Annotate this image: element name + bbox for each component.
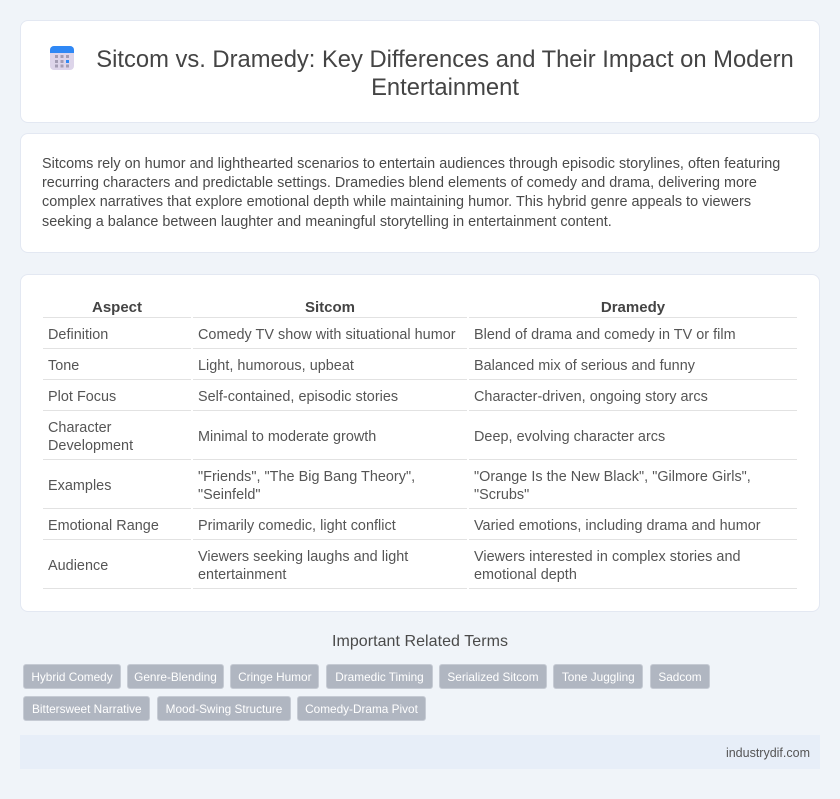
- comparison table: Development: [48, 438, 133, 454]
- table header: Dramedy: Dramedy: [601, 299, 665, 316]
- comparison table: "Scrubs": [474, 487, 529, 503]
- comparison table: emotional depth: [474, 567, 577, 583]
- intro text: Sitcoms rely on humor and lighthearted scenarios to entertain audiences through episodic storylines, often featuring: [42, 156, 780, 172]
- related terms tags: Cringe Humor: [238, 670, 312, 684]
- related terms tags: Serialized Sitcom: [447, 670, 539, 684]
- title: Entertainment: [371, 74, 519, 101]
- table header: Sitcom: Sitcom: [305, 299, 355, 316]
- related terms tags: Comedy-Drama Pivot: [305, 702, 418, 716]
- title: Sitcom vs. Dramedy: Key Differences and Their Impact on Modern: [96, 46, 794, 73]
- intro text: recurring characters and predictable settings. Dramedies blend elements of comedy and drama, delivering more: [42, 175, 757, 191]
- comparison table: Viewers seeking laughs and light: [198, 549, 408, 565]
- comparison table: entertainment: [198, 567, 286, 583]
- intro text: seeking a balance between laughter and meaningful storytelling in entertainment content.: [42, 214, 612, 230]
- related terms tags: Dramedic Timing: [335, 670, 424, 684]
- intro text: complex narratives that explore emotional depth while maintaining humor. This hybrid genre appeals to viewers: [42, 194, 751, 210]
- comparison table: Character-driven, ongoing story arcs: [474, 389, 708, 405]
- comparison table: Primarily comedic, light conflict: [198, 518, 396, 534]
- panel: header: [20, 20, 820, 123]
- related terms tags: Mood-Swing Structure: [166, 702, 282, 716]
- related terms tags: Sadcom: [658, 670, 702, 684]
- comparison table: Deep, evolving character arcs: [474, 429, 665, 445]
- table header: Aspect: Aspect: [92, 299, 142, 316]
- title: [96, 46, 794, 101]
- related terms tags: Bittersweet Narrative: [32, 702, 142, 716]
- intro text: [42, 156, 780, 230]
- comparison table: Tone: [48, 358, 79, 374]
- comparison table: Minimal to moderate growth: [198, 429, 376, 445]
- footer site name: industrydif.com: [726, 746, 810, 760]
- comparison table: Plot Focus: [48, 389, 116, 405]
- comparison table: "Seinfeld": [198, 487, 261, 503]
- comparison table: Viewers interested in complex stories and: [474, 549, 741, 565]
- comparison table: "Orange Is the New Black", "Gilmore Girls",: [474, 469, 751, 485]
- comparison table: Emotional Range: [48, 518, 159, 534]
- comparison table: Audience: [48, 558, 108, 574]
- related terms tags: Tone Juggling: [562, 670, 635, 684]
- comparison table: Comedy TV show with situational humor: [198, 327, 456, 343]
- related terms tags: Hybrid Comedy: [31, 670, 113, 684]
- comparison table: Examples: [48, 478, 111, 494]
- icon: calendar: [50, 46, 74, 70]
- comparison table: Self-contained, episodic stories: [198, 389, 398, 405]
- comparison table: Balanced mix of serious and funny: [474, 358, 695, 374]
- comparison table: Definition: [48, 327, 108, 343]
- related terms heading: Important Related Terms: [332, 633, 508, 650]
- footer bar: [20, 735, 820, 769]
- panel: introduction: [20, 133, 820, 253]
- comparison table: Character: [48, 420, 111, 436]
- comparison table: Varied emotions, including drama and humor: [474, 518, 761, 534]
- comparison table: Blend of drama and comedy in TV or film: [474, 327, 736, 343]
- related terms tags: Genre-Blending: [134, 670, 217, 684]
- comparison table: "Friends", "The Big Bang Theory",: [198, 469, 415, 485]
- comparison table: [43, 299, 797, 589]
- panel: comparison table: [20, 274, 820, 612]
- comparison table: Light, humorous, upbeat: [198, 358, 354, 374]
- related terms tags: [23, 664, 710, 721]
